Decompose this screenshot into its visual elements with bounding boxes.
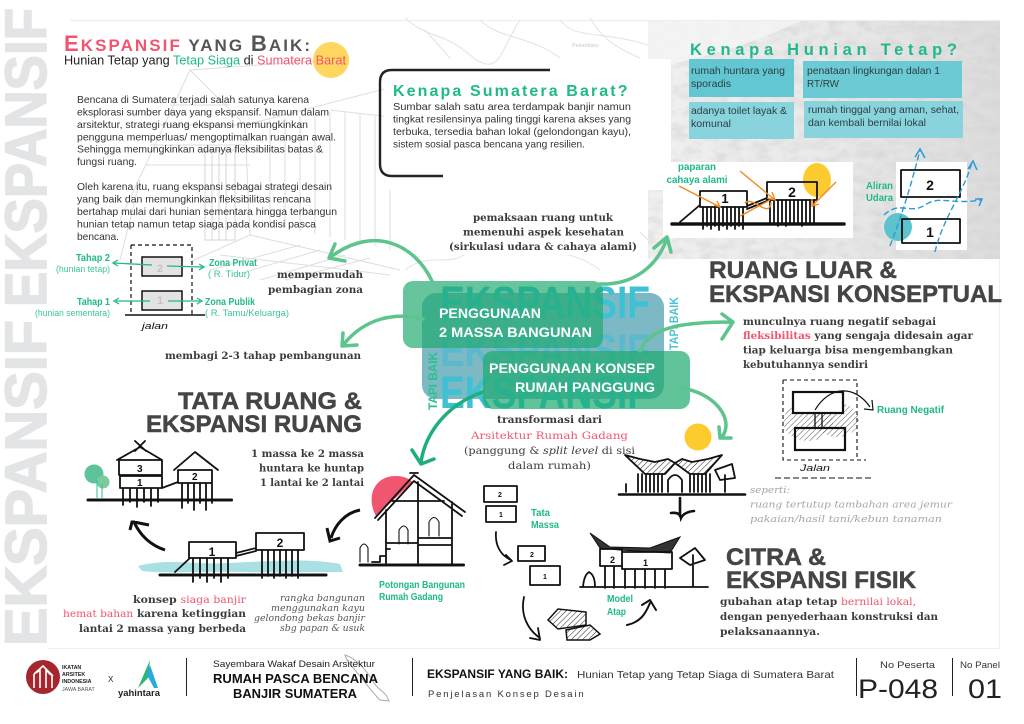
arrow: to kesehatan [600,237,671,284]
panel: ruang luar [709,257,1002,525]
sketch: air flow: 2 [926,177,934,193]
logo: yahintara: yahintara [118,688,161,699]
zone labels: Tahap 2 [76,253,110,264]
houses [901,170,960,243]
sketches: tata massa and atap: 1 [543,574,547,581]
sheet title: Penjelasan Konsep Desain [428,689,585,700]
description: munculnya ruang negatif sebagai [743,316,936,328]
teal circle [884,213,912,241]
sketch: natural light [663,162,853,238]
green box 2: PENGGUNAAN KONSEP [489,361,655,376]
description: kebutuhannya sendiri [743,359,868,371]
text: pemaksaan ruang: memenuhi aspek kesehatan [463,226,624,238]
heading [726,544,916,594]
description: fleksibilitas yang sengaja didesain agar [743,330,973,342]
text block: intro [77,94,337,243]
roof plans [548,609,600,640]
text: transformasi: transformasi dari [497,414,602,426]
arrow: to tahap [342,316,423,346]
site plan: jalan [141,321,168,331]
competition title: BANJIR SUMATERA [233,686,358,701]
houses [672,182,844,230]
labels: Tata [531,508,550,519]
TAPI BAIK labels: TAPI BAIK [667,297,681,350]
arrow: to rumah gadang [680,388,731,438]
label [379,580,465,603]
zone labels: Tahap 1 [77,297,110,308]
label: Udara [866,193,893,204]
zone labels: Zona Privat [209,258,258,269]
sketch: negative space: Jalan [799,463,830,473]
sketch: two houses [84,441,232,510]
text: siaga banjir: lantai 2 massa yang berbeda [79,623,246,635]
text: transformasi [464,414,636,472]
text: pemaksaan ruang: (sirkulasi udara & cahaya alami) [449,241,637,253]
green box 1 [403,281,603,348]
label: Aliran [866,181,893,192]
text: siaga banjir [63,594,247,635]
heading [146,388,362,438]
logo: IAI: IKATAN [62,665,81,671]
house with modern roof: 2 [610,555,615,565]
text block: intro: Sehingga memungkinkan adanya fleksibilitas batas & [77,144,323,156]
text: 1 massa ke 2 massa [251,448,364,460]
TAPI BAIK labels: TAPI BAIK [426,352,440,410]
body text: terbuka, tersedia bahan lokal (gelondongan kayu), [393,126,631,138]
labels [531,508,559,531]
participant number: P-048 [858,674,938,704]
background: map: Pekanbaru [572,43,599,49]
label: Ruang Negatif [877,405,945,416]
sun [684,424,712,450]
text: membagi tahap: membagi 2-3 tahap pembangunan [165,350,361,362]
description: pelaksanaannya. [720,626,820,638]
subtitle: Hunian Tetap yang Tetap Siaga di Sumatera Barat [64,52,346,68]
panel: title [64,31,349,78]
body text: sistem sosial pasca bencana yang resilien. [393,138,585,150]
description [743,316,973,371]
roof [625,455,722,474]
text block: intro: arsitektur, strategi ruang ekspansi memungkinkan [77,119,308,131]
text: pemaksaan ruang [449,212,637,253]
panel: citra [720,544,938,638]
zone labels: ( R. Tidur) [208,269,250,280]
text: transformasi: dalam rumah) [508,460,591,472]
green box 1: PENGGUNAAN [439,306,541,321]
green box 1: 2 MASSA BANGUNAN [439,325,592,340]
participant number: No Peserta [880,660,936,671]
text block: intro: hunian tetap namun tetap siaga pada kondisi pasca [77,218,316,230]
central diagram [403,277,690,418]
panel number: 01 [968,674,1002,704]
background: building sketch [120,60,400,280]
label: cahaya alami [666,175,728,186]
body text: Sumbar salah satu area terdampak banjir namun [393,101,631,113]
yellow accent circle [313,42,349,78]
heading: CITRA & [726,544,826,571]
massing plans [484,486,656,640]
zone labels: (hunian sementara) [35,308,110,319]
examples note: pakaian/hasil tani/kebun tanaman [750,514,942,525]
heading: TATA RUANG & [178,388,362,415]
green box 2: RUMAH PANGGUNG [515,380,655,395]
sketch: air flow [866,149,982,252]
text block: intro: eksplorasi sumber daya yang ekspansif. Namun dalam [77,106,329,118]
panel number [960,660,1002,704]
text: 1 lantai ke 2 lantai [260,477,364,489]
zone diagram [35,245,289,331]
reason card 4: rumah tinggal yang aman, sehat, [808,104,959,116]
note: rangka [254,593,366,634]
note: rangka: sbg papan & usuk [280,623,365,634]
sketch: two houses: 3 [137,464,143,475]
green box 2 [483,351,690,409]
logo: IAI: INDONESIA [62,679,92,685]
heading: Kenapa Sumatera Barat? [393,83,630,100]
reason card 3: adanya toilet layak & [691,105,787,117]
air arrows [884,150,981,252]
sketch: natural light: 2 [788,184,796,200]
arrow: to potongan [412,392,483,464]
label: Potongan Bangunan [379,580,465,591]
site plan: 1 [157,295,163,307]
watermark: vertical EKSPANSIF [0,8,59,646]
text [251,448,364,489]
panel number: No Panel [960,660,1000,671]
body [619,464,745,494]
description: gubahan atap tetap bernilai lokal, [720,596,916,608]
note: rangka: gelondong bekas banjir [254,613,366,624]
arrow: to zona [329,241,432,281]
competition title: Sayembara Wakaf Desain Arsitektur [213,659,375,670]
house with modern roof: 1 [643,558,648,568]
label [666,162,728,186]
sheet title: Hunian Tetap yang Tetap Siaga di Sumatera Barat [577,669,834,681]
light arrows [679,171,836,216]
competition title [213,655,389,701]
examples note [750,485,954,525]
sketches: tata massa and atap: 2 [530,552,534,559]
text: mempermudah pembagian zona: mempermudah [277,269,363,281]
site plan: 2 [157,263,163,275]
sheet title: EKSPANSIF YANG BAIK: [427,669,568,681]
label atap [607,594,633,618]
zone labels [35,253,289,319]
sun [803,163,831,197]
bracket [380,70,550,176]
text: huntara ke huntap [259,462,364,474]
logo: IAI: ARSITEK [62,672,85,678]
heading: Kenapa Hunian Tetap? [690,41,962,59]
arrow: to konseptual [640,314,733,351]
sketch: air flow: 1 [926,224,934,240]
panel: Kenapa Sumatera Barat [380,70,631,176]
house with modern roof [580,533,708,588]
background: flood photo [648,21,1000,259]
text block: intro: bencana. [77,231,119,243]
dividers [186,658,952,696]
sketch: flood section: 2 [277,536,284,550]
sketch: natural light: 1 [721,191,729,206]
footer [26,655,1002,704]
sheet title [427,669,834,700]
text block: intro: fungsi ruang. [77,156,137,168]
sketches: tata massa and atap: 1 [499,512,503,519]
site plan [125,245,205,331]
text: transformasi: Arsitektur Rumah Gadang [470,430,628,442]
text: mempermudah pembagian zona [268,269,363,296]
sketch: negative space [775,380,873,478]
reason card 4 [804,101,963,138]
text: mempermudah pembagian zona: pembagian zona [268,284,363,296]
heading: EKSPANSI RUANG [146,411,362,438]
panel: tata ruang [63,388,465,635]
reason card 3: komunal [691,118,731,130]
reason card 1 [689,59,794,97]
sketch: two houses: 1 [137,478,143,489]
reason card 2 [803,61,962,98]
background: map [405,18,648,270]
zone labels: (hunian tetap) [56,264,110,275]
reason card 4: dan kembali bernilai lokal [808,117,926,129]
teal panel [422,293,664,399]
TAPI BAIK labels [426,297,681,410]
examples note: seperti: [750,485,790,496]
sketches: tata massa and atap: 2 [498,492,502,499]
description: dengan penyederhaan konstruksi dan [720,611,938,623]
label atap: Atap [607,607,626,618]
heading [709,257,1002,308]
label: Rumah Gadang [379,592,443,603]
label: paparan [678,162,716,173]
note: rangka: rangka bangunan [280,593,365,604]
label atap: Model [607,594,633,605]
text: pemaksaan ruang: pemaksaan ruang untuk [473,212,614,224]
down arrow [671,498,694,518]
description: tiap keluarga bisa mengembangkan [743,344,953,356]
reason card 2: penataan lingkungan dalan 1 [807,65,940,77]
logo: IAI [26,660,96,694]
text block: intro: pengguna memperluas/ mengoptimalkan ruangan awal. [77,132,336,144]
body text [393,101,631,150]
sketch: two houses: 2 [192,472,198,483]
separator x: X [108,675,114,684]
logo: IAI: JAWA BARAT [62,687,96,693]
heading: EKSPANSI KONSEPTUAL [709,281,1002,308]
reason card 3 [689,102,794,139]
large EKSPANSIF text [440,277,650,418]
competition title: RUMAH PASCA BENCANA [213,671,379,686]
sketch: section of rumah gadang [360,473,465,565]
curved arrow [327,510,360,541]
reason card 1: rumah huntara yang [691,65,785,77]
label [866,181,893,204]
text block: intro: Bencana di Sumatera terjadi salah satunya karena [77,94,309,106]
reason card 1: sporadis [691,78,731,90]
reason card 2: RT/RW [807,78,839,90]
note: rangka: menggunakan kayu [271,603,365,614]
white panel behind Kenapa Sumatera Barat [384,59,671,255]
zone labels: ( R. Tamu/Keluarga) [205,308,289,319]
text: siaga banjir: konsep siaga banjir [133,594,247,606]
heading: RUANG LUAR & [709,257,897,284]
sketch: flood section: 1 [209,545,216,559]
curved arrow [130,522,165,550]
examples note: ruang tertutup tambahan area jemur [750,500,954,510]
large EKSPANSIF text: EKSPANSIF [440,325,650,376]
labels: Massa [531,520,559,531]
heading: EKSPANSI FISIK [726,567,916,594]
large EKSPANSIF text: EKSPANSIF [440,277,650,328]
large EKSPANSIF text: EKSPANSIF [440,367,650,418]
sketch: rumah gadang [619,424,745,518]
body text: tingkat resilensinya paling tinggi karena akses yang [393,114,631,126]
logo: yahintara [118,660,161,699]
text: transformasi: (panggung & split level di sisi [464,445,636,457]
sketch: flood section [138,533,343,582]
heading: EKSPANSIF YANG BAIK: [64,31,313,56]
text block: intro: yang baik dan memungkinkan fleksibilitas rencana [77,194,311,206]
description [720,596,938,638]
participant number [858,660,938,704]
text: siaga banjir: hemat bahan karena ketinggian [63,608,246,620]
sketches: tata massa and atap [484,486,708,640]
text block: intro: bertahap mulai dari hunian sementara hingga terbangun [77,206,337,218]
zone labels: Zona Publik [205,297,255,308]
zone arrows [113,260,204,304]
panel: Kenapa Hunian Tetap [689,41,963,139]
text block: intro: Oleh karena itu, ruang ekspansi sebagai strategi desain [77,181,332,193]
